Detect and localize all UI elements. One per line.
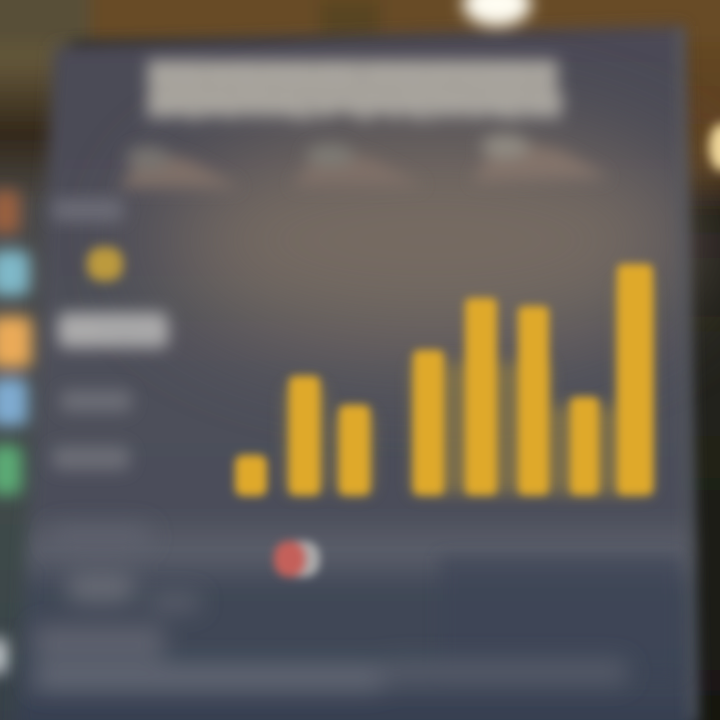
bar glow [285, 280, 652, 495]
right edge light [709, 123, 720, 171]
tile 3 [472, 134, 610, 182]
ceiling light [463, 0, 531, 26]
lighter right bezel [674, 26, 698, 720]
tile 1 [118, 146, 242, 188]
title: MONTHLY OVERVIEW [145, 87, 565, 128]
tile 2 [292, 144, 425, 186]
headline value: 98775 [56, 311, 170, 353]
lower dark section [440, 556, 680, 676]
icon: white [0, 638, 6, 674]
icon: brown [0, 190, 20, 234]
warm screen reflection [160, 130, 700, 350]
icon: green [0, 445, 22, 495]
title: REVENUE REPORT [145, 52, 555, 93]
bar chart [235, 264, 653, 496]
lower text block [34, 526, 628, 690]
left edge app icons [0, 190, 32, 674]
sidebar label [52, 198, 124, 222]
icon: teal [0, 250, 30, 296]
sidebar stats [52, 390, 132, 470]
title [145, 52, 565, 128]
red status icon [274, 541, 320, 577]
yellow bars [235, 264, 653, 496]
icon: blue [0, 378, 28, 426]
summary tiles [118, 134, 610, 188]
icon: orange [0, 316, 32, 368]
legend swatch [87, 247, 123, 281]
